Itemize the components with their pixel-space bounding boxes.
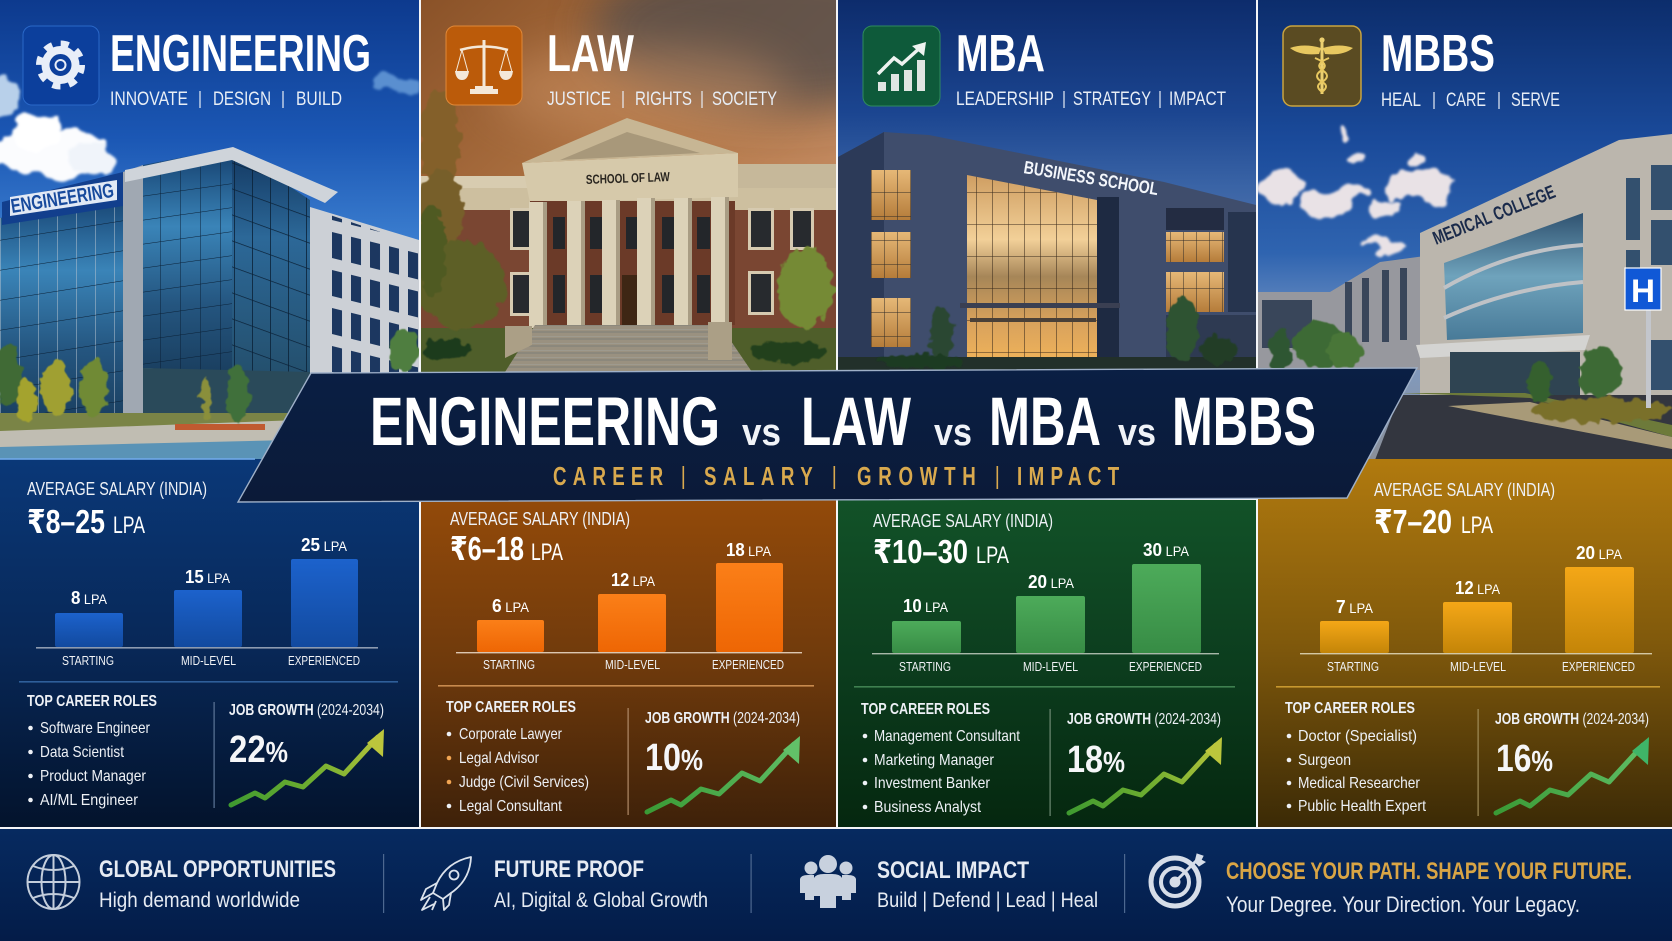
tagline: SOCIETY bbox=[712, 89, 777, 110]
text: Build | Defend | Lead | Heal bbox=[877, 889, 1098, 912]
title: vs bbox=[934, 412, 972, 454]
salary heading: AVERAGE SALARY (INDIA) bbox=[873, 511, 1053, 531]
panel: law salary and roles bbox=[421, 500, 836, 827]
job growth: 10% bbox=[645, 737, 703, 779]
heading: ENGINEERING bbox=[110, 25, 371, 83]
tagline: INNOVATE bbox=[110, 89, 188, 110]
career roles: Surgeon bbox=[1298, 752, 1351, 769]
bar chart: MID-LEVEL bbox=[1023, 660, 1078, 674]
bar chart: 30 LPA bbox=[1143, 540, 1189, 560]
tagline bbox=[547, 89, 777, 110]
job growth: 18% bbox=[1067, 739, 1125, 781]
title banner bbox=[238, 368, 1417, 502]
text: AI, Digital & Global Growth bbox=[494, 889, 708, 912]
career roles: Doctor (Specialist) bbox=[1298, 728, 1417, 745]
heading: SOCIAL IMPACT bbox=[877, 857, 1029, 884]
panel: mbbs salary and roles bbox=[1258, 459, 1672, 827]
title: LAW bbox=[801, 383, 912, 460]
panel: mba salary and roles bbox=[838, 500, 1256, 827]
salary range: ₹8–25 bbox=[27, 503, 105, 540]
career roles: Investment Banker bbox=[874, 775, 991, 792]
icon: scales of justice bbox=[446, 26, 522, 105]
tagline: CARE bbox=[1446, 90, 1486, 111]
icon: people bbox=[800, 855, 856, 908]
icon: growth chart bbox=[863, 26, 940, 106]
salary range: ₹6–18 bbox=[450, 530, 524, 567]
subtitle: IMPACT bbox=[1017, 461, 1119, 491]
salary range: ₹7–20 bbox=[1374, 503, 1452, 540]
career roles bbox=[861, 701, 1020, 816]
bar chart: 20 LPA bbox=[1028, 572, 1074, 592]
salary heading: AVERAGE SALARY (INDIA) bbox=[1374, 480, 1555, 500]
tagline: JUSTICE bbox=[547, 89, 611, 110]
heading: FUTURE PROOF bbox=[494, 856, 644, 883]
salary range: LPA bbox=[531, 539, 563, 566]
job growth: JOB GROWTH (2024-2034) bbox=[645, 710, 800, 727]
title bbox=[370, 383, 1316, 460]
career roles bbox=[446, 699, 589, 815]
bar chart: MID-LEVEL bbox=[605, 658, 660, 672]
title: MBA bbox=[989, 383, 1101, 460]
bar chart: EXPERIENCED bbox=[712, 658, 784, 672]
photo: medical college building bbox=[1258, 0, 1672, 460]
tagline: LEADERSHIP bbox=[956, 89, 1054, 110]
career roles: Data Scientist bbox=[40, 744, 124, 761]
bar chart: MID-LEVEL bbox=[181, 654, 236, 668]
career roles: Marketing Manager bbox=[874, 752, 995, 769]
panel: engineering salary and roles bbox=[0, 458, 419, 827]
bar chart: EXPERIENCED bbox=[1562, 660, 1635, 674]
title: vs bbox=[742, 412, 781, 454]
career roles: Corporate Lawyer bbox=[459, 726, 563, 743]
job growth bbox=[1067, 711, 1222, 813]
text: Your Degree. Your Direction. Your Legacy. bbox=[1226, 892, 1580, 917]
career roles bbox=[27, 693, 157, 809]
bar chart: 25 LPA bbox=[301, 535, 347, 555]
global opportunities bbox=[28, 855, 336, 912]
job growth: 16% bbox=[1496, 738, 1553, 780]
text: High demand worldwide bbox=[99, 889, 300, 912]
photo: engineering building bbox=[0, 0, 419, 460]
bar chart bbox=[36, 535, 378, 668]
career roles: Business Analyst bbox=[874, 799, 981, 816]
bar chart: STARTING bbox=[483, 658, 535, 672]
salary heading: AVERAGE SALARY (INDIA) bbox=[450, 509, 630, 529]
subtitle bbox=[553, 461, 1119, 491]
job growth bbox=[1495, 711, 1649, 813]
header: law bbox=[446, 25, 777, 110]
tagline bbox=[956, 89, 1226, 110]
title: vs bbox=[1118, 412, 1156, 454]
bar chart: 12 LPA bbox=[1455, 578, 1500, 598]
job growth: 22% bbox=[229, 729, 288, 771]
title: ENGINEERING bbox=[370, 383, 720, 460]
heading: GLOBAL OPPORTUNITIES bbox=[99, 856, 336, 883]
career roles: Management Consultant bbox=[874, 728, 1020, 745]
bar chart: 12 LPA bbox=[611, 570, 655, 590]
salary range: LPA bbox=[113, 512, 145, 539]
career roles: Judge (Civil Services) bbox=[459, 774, 589, 791]
bar chart: 18 LPA bbox=[726, 540, 771, 560]
subtitle: CAREER bbox=[553, 461, 663, 491]
tagline: SERVE bbox=[1511, 90, 1560, 111]
growth arrow bbox=[1496, 737, 1649, 813]
salary range: ₹10–30 bbox=[873, 533, 968, 570]
career roles bbox=[1285, 700, 1426, 815]
icon: caduceus bbox=[1283, 26, 1361, 106]
career roles: AI/ML Engineer bbox=[40, 792, 139, 809]
subtitle: SALARY bbox=[704, 461, 813, 491]
growth arrow bbox=[647, 736, 800, 812]
growth arrow bbox=[1069, 737, 1222, 813]
career roles: Public Health Expert bbox=[1298, 798, 1426, 815]
header: engineering bbox=[23, 25, 371, 110]
bar chart: 6 LPA bbox=[492, 596, 529, 616]
salary range: LPA bbox=[976, 542, 1009, 569]
future proof bbox=[421, 856, 708, 912]
bar chart: 15 LPA bbox=[185, 567, 230, 587]
header: mbbs bbox=[1283, 25, 1560, 111]
bar chart: 20 LPA bbox=[1576, 543, 1622, 563]
tagline bbox=[1381, 90, 1560, 111]
photo: medical college building: H bbox=[1631, 273, 1655, 309]
icon: globe bbox=[28, 855, 80, 909]
bar chart bbox=[872, 540, 1219, 674]
icon: target bbox=[1151, 854, 1205, 906]
tagline: STRATEGY bbox=[1073, 89, 1151, 110]
photo: business school building: BUSINESS SCHOOL bbox=[1022, 157, 1160, 199]
bar chart: MID-LEVEL bbox=[1450, 660, 1506, 674]
social impact bbox=[800, 855, 1098, 912]
bar chart: EXPERIENCED bbox=[288, 654, 360, 668]
career roles: TOP CAREER ROLES bbox=[861, 701, 990, 718]
heading: MBBS bbox=[1381, 25, 1495, 83]
bar chart: EXPERIENCED bbox=[1129, 660, 1202, 674]
photo: business school building bbox=[838, 0, 1256, 374]
bar chart: STARTING bbox=[899, 660, 951, 674]
career roles: TOP CAREER ROLES bbox=[446, 699, 576, 716]
career roles: TOP CAREER ROLES bbox=[1285, 700, 1415, 717]
tagline: DESIGN bbox=[213, 89, 271, 110]
header: mba bbox=[863, 25, 1226, 110]
career roles: Software Engineer bbox=[40, 720, 151, 737]
bar chart bbox=[1300, 543, 1652, 674]
icon: gear bbox=[23, 26, 99, 105]
closing call to action bbox=[1151, 854, 1632, 917]
bar chart: STARTING bbox=[62, 654, 114, 668]
footer bar bbox=[0, 829, 1672, 941]
tagline: RIGHTS bbox=[635, 89, 692, 110]
job growth: JOB GROWTH (2024-2034) bbox=[1495, 711, 1649, 728]
subtitle: GROWTH bbox=[857, 461, 976, 491]
growth arrow bbox=[231, 729, 384, 805]
heading: MBA bbox=[956, 25, 1045, 83]
tagline: HEAL bbox=[1381, 90, 1421, 111]
tagline bbox=[110, 89, 342, 110]
job growth: JOB GROWTH (2024-2034) bbox=[229, 702, 384, 719]
job growth bbox=[229, 702, 384, 805]
photo: engineering building: ENGINEERING bbox=[9, 180, 116, 218]
title: MBBS bbox=[1172, 383, 1316, 460]
bar chart: 10 LPA bbox=[903, 596, 948, 616]
job growth bbox=[645, 710, 800, 812]
career roles: Legal Consultant bbox=[459, 798, 562, 815]
heading: LAW bbox=[547, 25, 635, 83]
bar chart: 8 LPA bbox=[71, 588, 107, 608]
tagline: IMPACT bbox=[1169, 89, 1226, 110]
salary heading: AVERAGE SALARY (INDIA) bbox=[27, 479, 207, 499]
career roles: Legal Advisor bbox=[459, 750, 540, 767]
photo: medical college building: MEDICAL COLLEGE bbox=[1430, 182, 1559, 250]
tagline: BUILD bbox=[296, 89, 342, 110]
salary range: LPA bbox=[1461, 512, 1493, 539]
photo: law school building bbox=[421, 0, 836, 372]
job growth: JOB GROWTH (2024-2034) bbox=[1067, 711, 1221, 728]
career roles: Product Manager bbox=[40, 768, 147, 785]
bar chart bbox=[456, 540, 802, 672]
bar chart: 7 LPA bbox=[1336, 597, 1373, 617]
bar chart: STARTING bbox=[1327, 660, 1379, 674]
career roles: TOP CAREER ROLES bbox=[27, 693, 157, 710]
career roles: Medical Researcher bbox=[1298, 775, 1421, 792]
icon: rocket bbox=[421, 857, 471, 910]
photo: law school building: SCHOOL OF LAW bbox=[586, 169, 671, 187]
